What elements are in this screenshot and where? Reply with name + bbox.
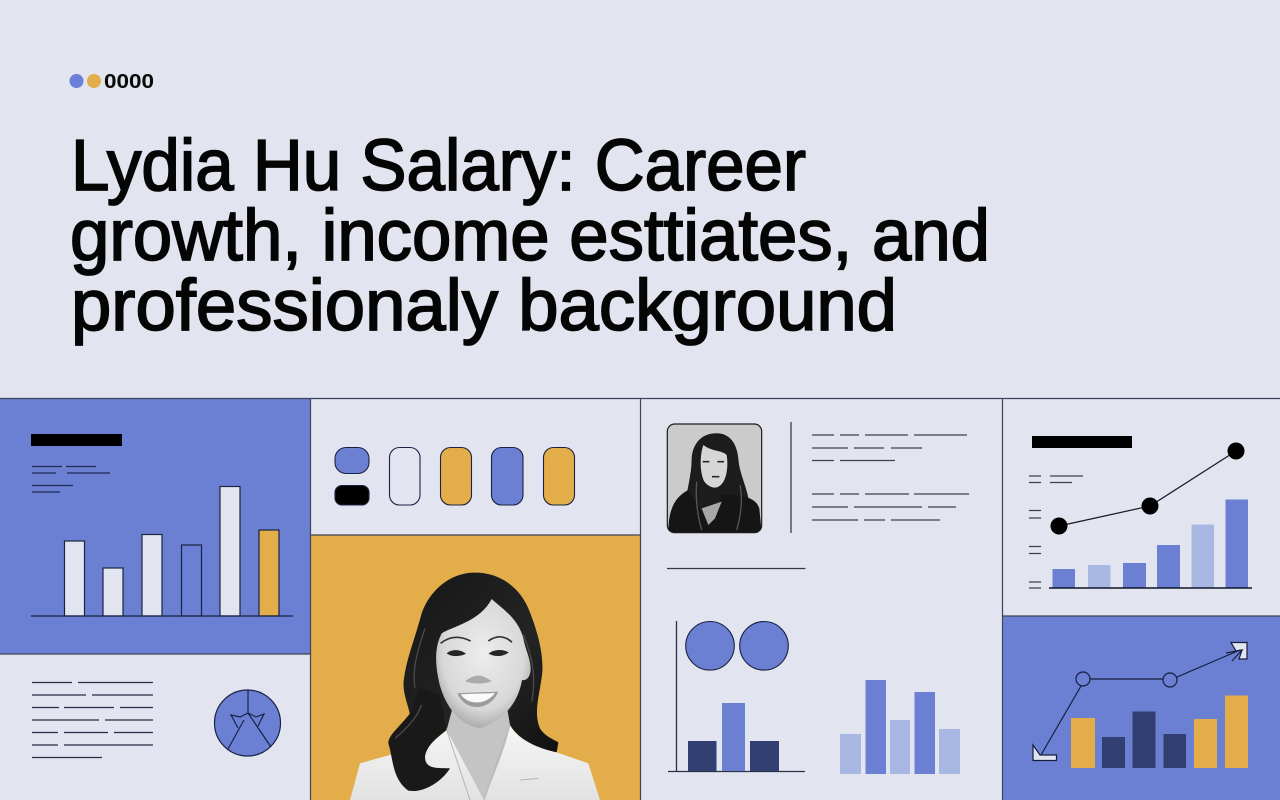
bars bbox=[1052, 500, 1248, 588]
text lines bbox=[32, 466, 110, 492]
bars bbox=[1071, 696, 1248, 768]
lapel bbox=[447, 725, 538, 800]
panel: yellow portrait bbox=[311, 535, 640, 800]
divider bbox=[667, 568, 806, 570]
line series bbox=[1050, 442, 1244, 534]
portrait of woman bbox=[350, 573, 600, 800]
nose bbox=[465, 676, 492, 683]
divider bbox=[790, 422, 792, 533]
panel heading bar bbox=[31, 434, 122, 446]
brows bbox=[441, 637, 512, 643]
eyes bbox=[447, 650, 509, 656]
title: growth, income esttiates, and bbox=[70, 196, 990, 276]
hair back bbox=[404, 573, 558, 752]
circles and bars chart bbox=[668, 621, 805, 772]
logo bbox=[70, 71, 154, 93]
title: Lydia Hu Salary: Career bbox=[71, 126, 806, 206]
panel: blue arrow chart bbox=[1002, 616, 1280, 800]
title: professionaly background bbox=[71, 266, 897, 346]
jacket bbox=[350, 725, 600, 800]
hair highlights bbox=[395, 628, 534, 738]
arrow path bbox=[1033, 642, 1247, 760]
bar chart bbox=[31, 486, 293, 616]
logo: 0000 bbox=[104, 71, 154, 93]
panel: profile bbox=[667, 422, 969, 774]
neck bbox=[447, 705, 510, 800]
panel: pill swatches bbox=[335, 448, 574, 505]
heading bar bbox=[1032, 436, 1132, 448]
text lines bbox=[32, 682, 153, 758]
title bbox=[70, 126, 990, 346]
bar chart bbox=[840, 680, 960, 774]
hair lock front bbox=[388, 688, 450, 791]
pie icon bbox=[214, 690, 280, 756]
panel: blue bar chart bbox=[0, 398, 310, 654]
text lines bbox=[812, 435, 969, 520]
panel: text and pie bbox=[0, 654, 310, 800]
grid lines bbox=[0, 398, 1280, 800]
smile bbox=[457, 692, 498, 707]
panel: line and bar chart bbox=[1029, 436, 1252, 588]
axis labels bbox=[1029, 476, 1083, 588]
face bbox=[436, 599, 531, 728]
profile photo bbox=[667, 424, 762, 533]
